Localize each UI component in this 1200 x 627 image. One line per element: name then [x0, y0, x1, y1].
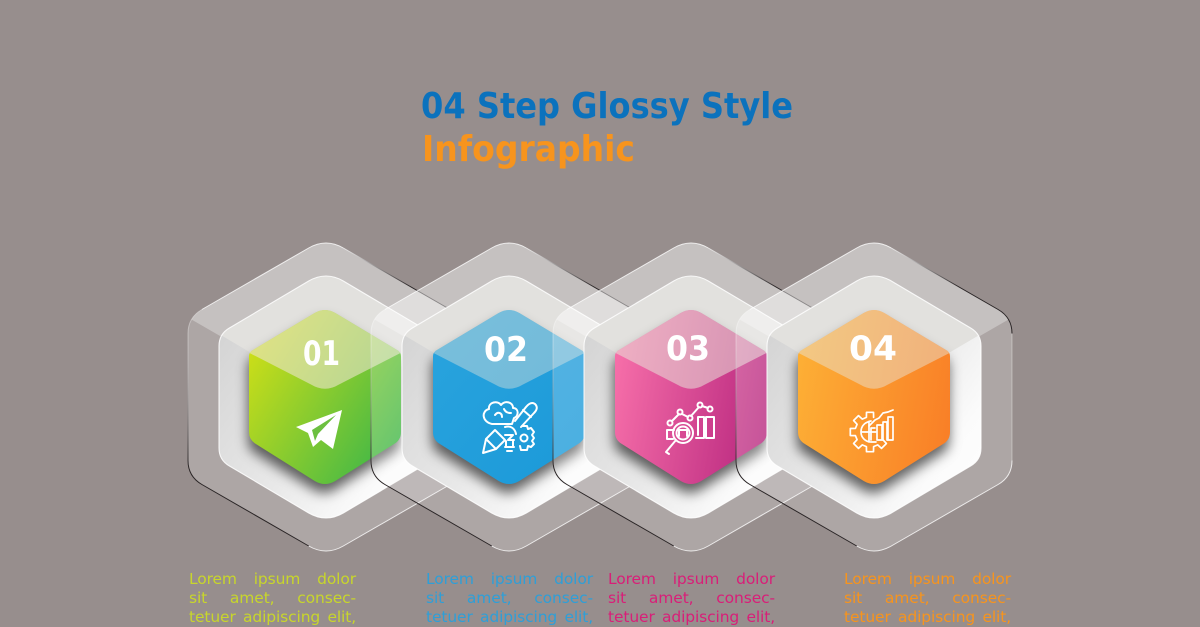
step 4 hexagon: [736, 238, 1012, 551]
frosted inner hexagon 3: [584, 271, 798, 518]
icon: gear with growth chart: [850, 410, 893, 452]
glass outer hexagon 1: [188, 238, 464, 551]
glass outer hexagon 2: [371, 238, 647, 551]
icon: brain, pencil, bulb and gear: [483, 402, 537, 453]
number 02: 02: [484, 330, 528, 370]
cube shadow 2: [432, 319, 584, 493]
text block: step 4: [844, 570, 1012, 626]
text block: step 1: tetuer adipiscing elit,: [189, 608, 356, 626]
step 1 hexagon: [188, 238, 464, 551]
icon: magnifier and bar chart: [666, 402, 714, 454]
text block: step 3: sit amet, consec-: [608, 589, 775, 607]
cube top face 3: [616, 310, 766, 389]
text block: step 1: [189, 570, 356, 626]
cube shadow 4: [797, 319, 949, 493]
title: [421, 86, 793, 170]
text block: step 2: Lorem ipsum dolor: [426, 570, 593, 588]
blue cube: [433, 310, 585, 484]
number 04: 04: [849, 329, 897, 369]
text block: step 3: tetuer adipiscing elit,: [608, 608, 775, 626]
text block: step 2: sit amet, consec-: [426, 589, 593, 607]
orange cube: [798, 310, 950, 484]
cube top face 4: [798, 310, 950, 389]
glass outer hexagon 3: [553, 238, 829, 551]
pink cube: [615, 310, 767, 484]
cube shadow 3: [614, 319, 766, 493]
icon: paper plane: [296, 410, 342, 449]
number 01: 01: [303, 334, 340, 374]
text block: step 4: tetuer adipiscing elit,: [844, 608, 1011, 626]
glass outer hexagon 4: [736, 238, 1012, 551]
step 3 hexagon: [553, 238, 829, 551]
text block: step 4: sit amet, consec-: [844, 589, 1011, 607]
cube shadow 1: [248, 319, 400, 493]
cube top face 2: [434, 310, 584, 389]
text block: step 3: [608, 570, 776, 626]
number 03: 03: [666, 329, 710, 369]
text block: step 2: [426, 570, 594, 626]
text block: step 1: Lorem ipsum dolor: [189, 570, 356, 588]
step 2 hexagon: [371, 238, 647, 551]
title: 04 Step Glossy Style: [421, 86, 793, 127]
text block: step 3: Lorem ipsum dolor: [608, 570, 775, 588]
title: Infographic: [422, 129, 635, 170]
frosted inner hexagon 4: [767, 271, 981, 518]
cube top face 1: [250, 310, 400, 389]
text block: step 4: Lorem ipsum dolor: [844, 570, 1011, 588]
frosted inner hexagon 2: [402, 271, 616, 518]
frosted inner hexagon 1: [219, 271, 433, 518]
text block: step 2: tetuer adipiscing elit,: [426, 608, 593, 626]
green cube: [249, 310, 401, 484]
text block: step 1: sit amet, consec-: [189, 589, 356, 607]
